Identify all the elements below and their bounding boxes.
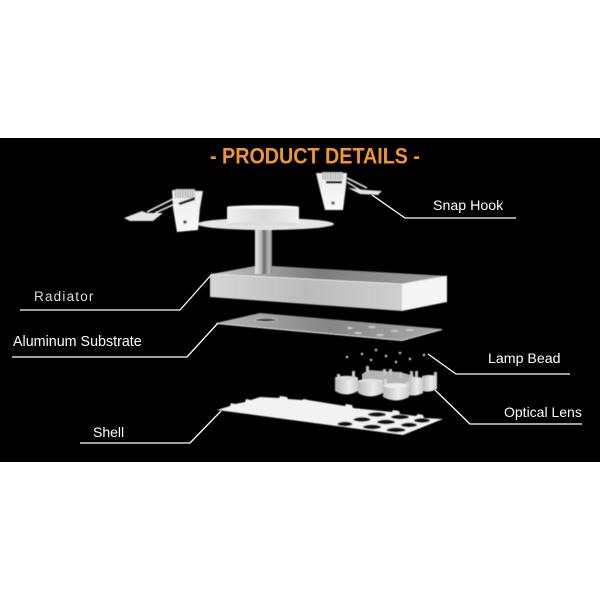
- shell: [217, 396, 443, 435]
- lens back rows: [362, 366, 437, 388]
- lens front: [383, 379, 409, 400]
- lamp beads: [346, 349, 425, 363]
- aluminum substrate: [216, 313, 442, 341]
- left snap hook: [124, 189, 203, 232]
- product exploded view: [124, 172, 447, 435]
- radiator post: [255, 228, 272, 274]
- right snap hook: [316, 172, 382, 210]
- radiator block: [210, 266, 447, 311]
- lens right middle: [408, 377, 423, 396]
- label: Lamp Bead: Lamp Bead: [488, 351, 561, 367]
- lens right: [422, 375, 437, 392]
- optical lens: [335, 366, 437, 400]
- label: Optical Lens: Optical Lens: [504, 404, 582, 420]
- label: Shell: Shell: [93, 424, 124, 440]
- title: - PRODUCT DETAILS -: [210, 144, 420, 168]
- leader lines: [12, 195, 582, 443]
- label: Radiator: Radiator: [34, 289, 95, 304]
- lens left: [335, 371, 358, 394]
- radiator disc: [197, 218, 334, 230]
- lens middle: [358, 379, 383, 396]
- black background band: [0, 138, 600, 462]
- radiator cylinder: [227, 205, 299, 226]
- label: Aluminum Substrate: Aluminum Substrate: [13, 334, 142, 350]
- label: Snap Hook: Snap Hook: [433, 198, 504, 214]
